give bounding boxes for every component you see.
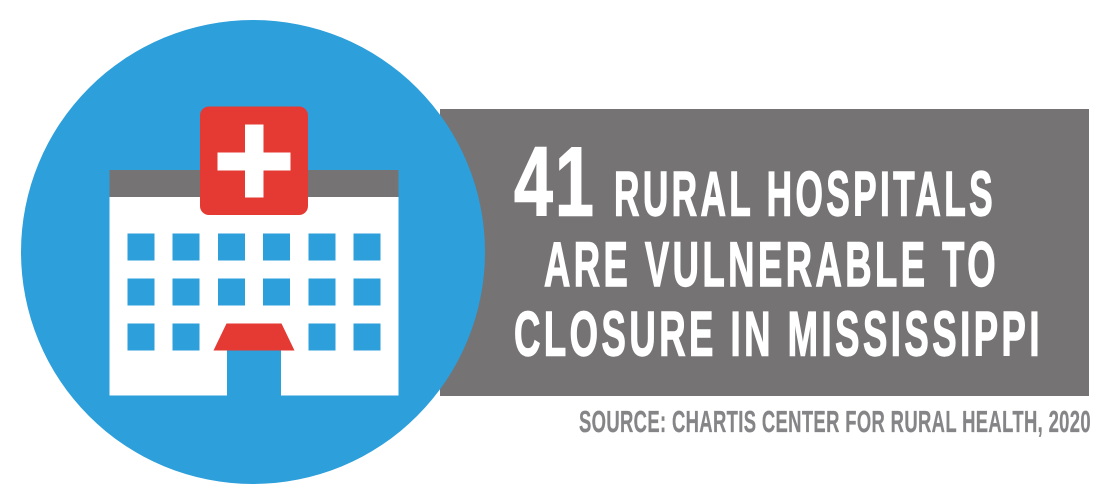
hospital sign [200,106,308,215]
icon: hospital in blue circle [21,20,485,484]
blue circle [21,20,485,484]
building roof [110,170,398,197]
headline [514,126,1043,370]
banner: gray panel [440,109,1089,396]
door awning [214,324,294,350]
building body [110,196,398,396]
windows [128,234,380,350]
number 41: 41 [514,126,596,236]
